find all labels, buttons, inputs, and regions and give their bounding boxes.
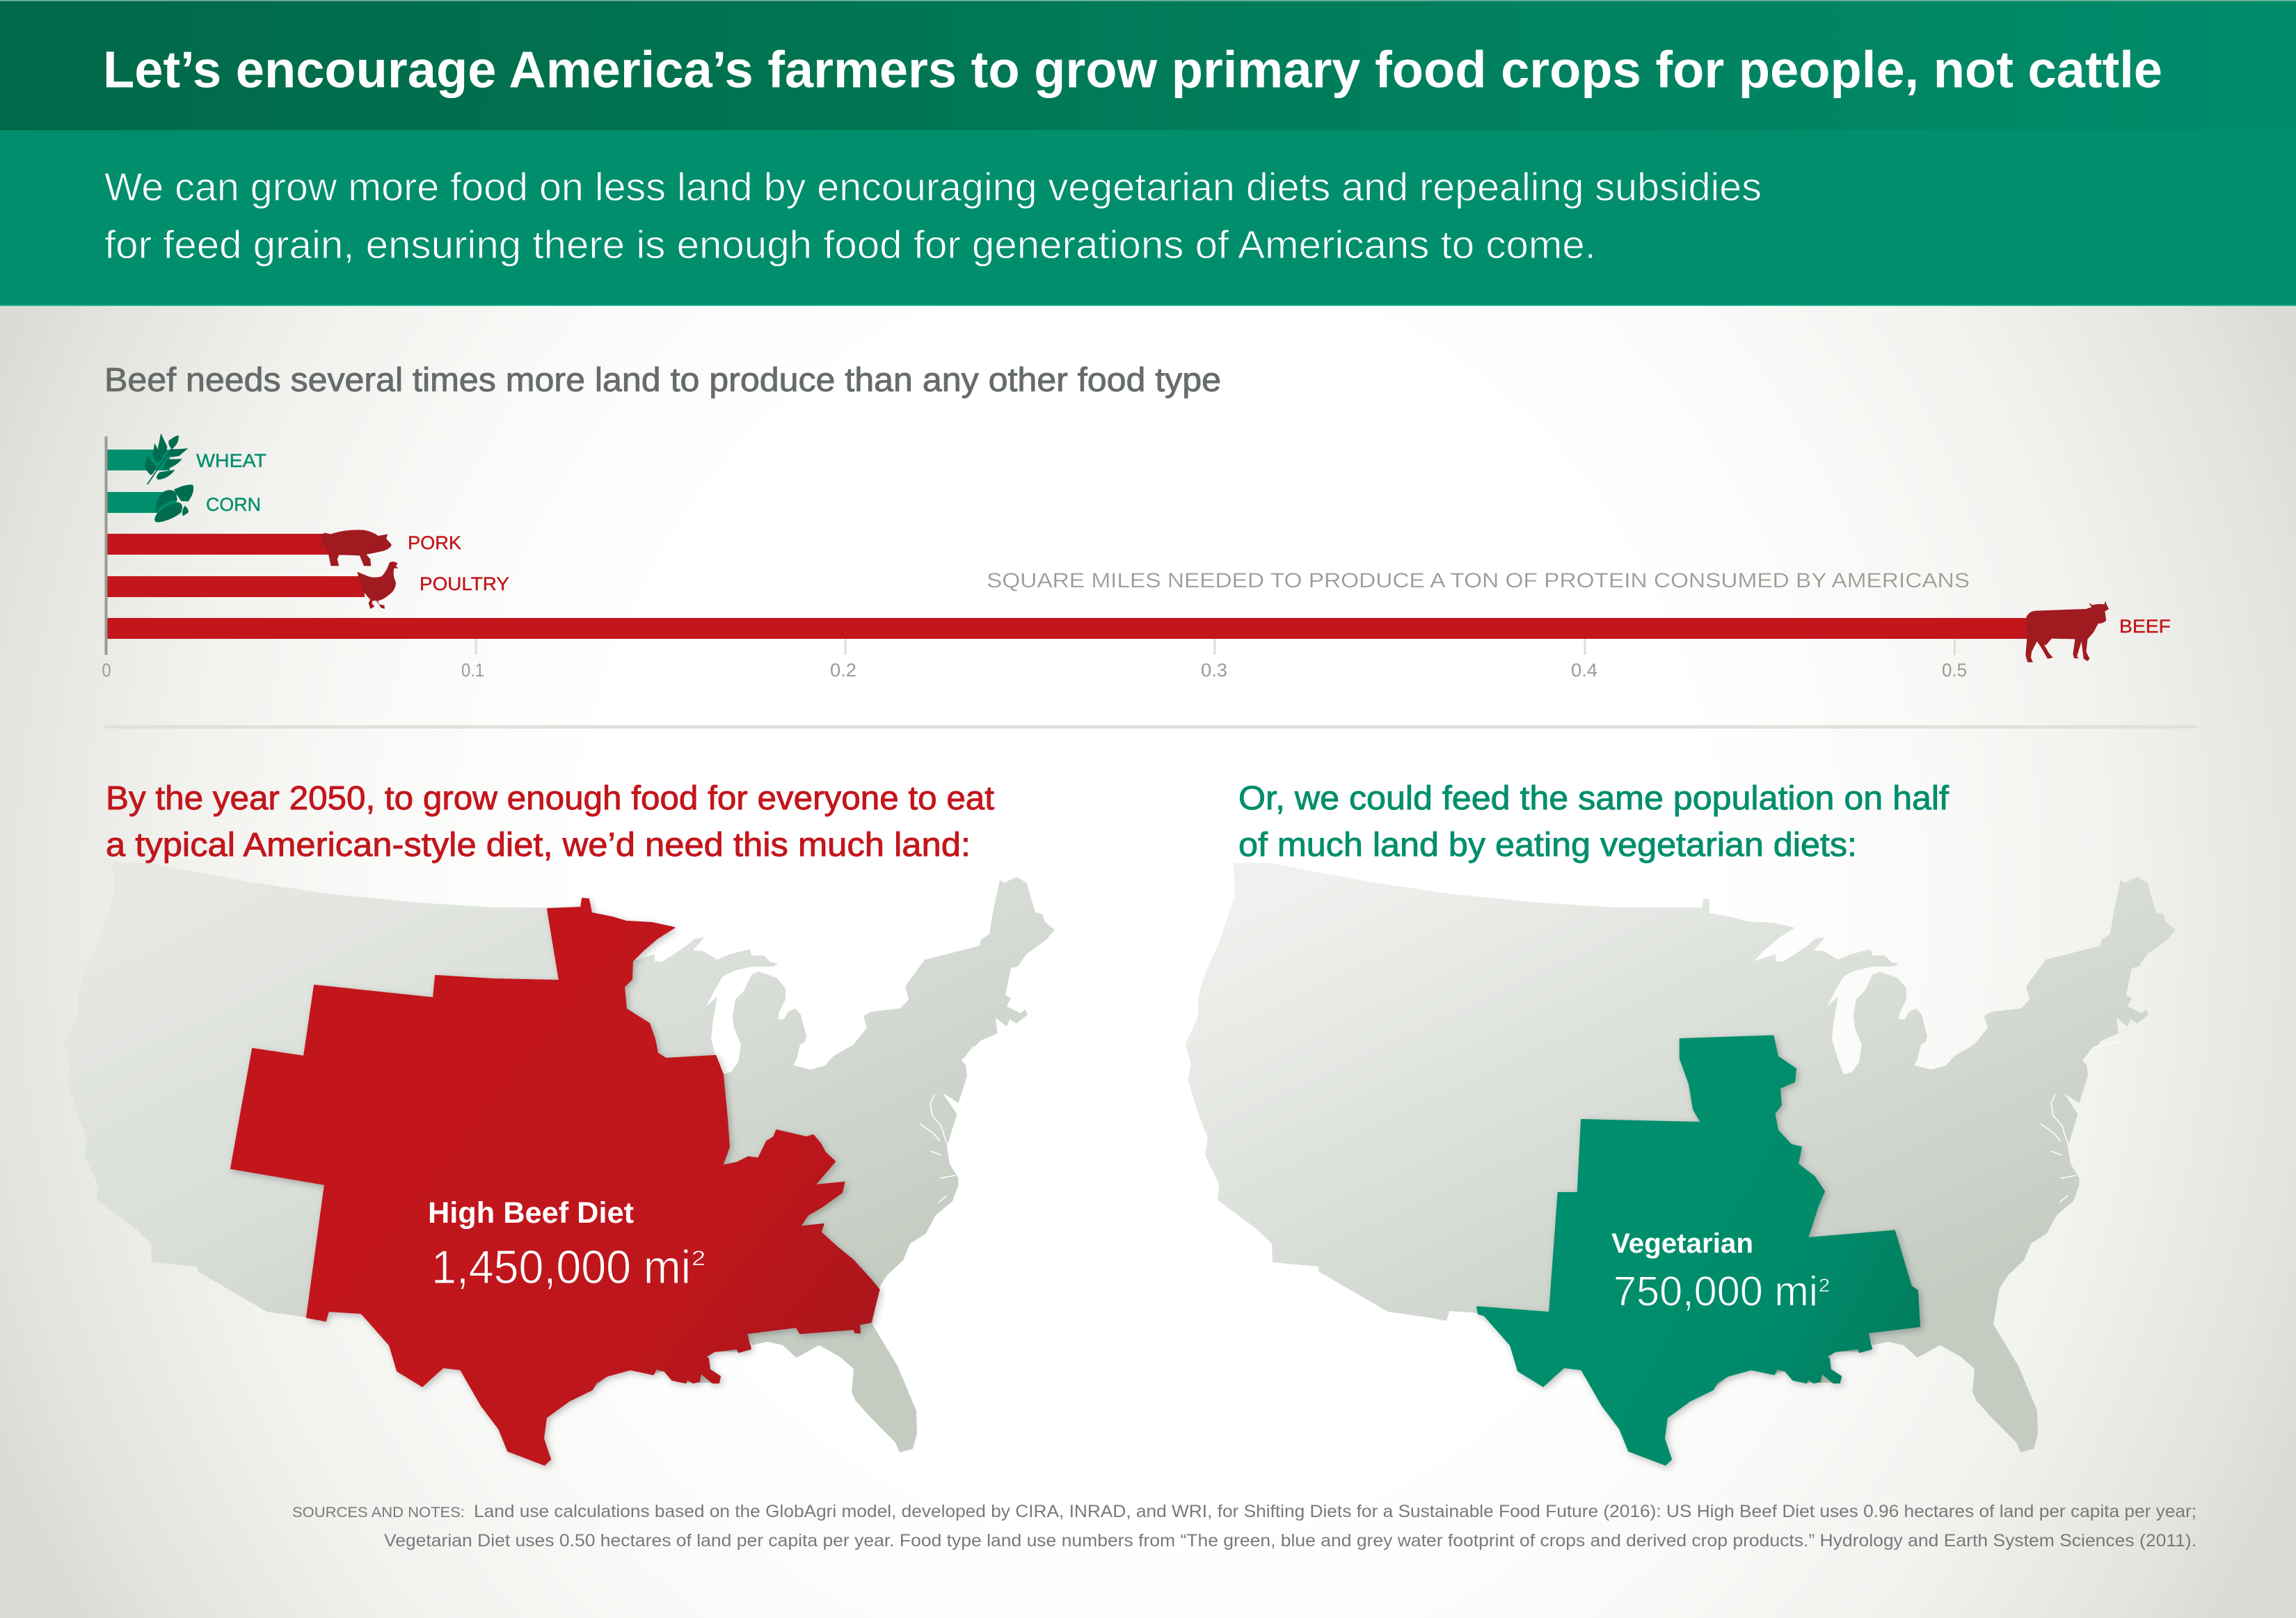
icon: chicken	[357, 562, 399, 609]
label: beef: BEEF	[2119, 616, 2171, 637]
beef bar	[107, 618, 2029, 639]
green land area	[1477, 1036, 1920, 1465]
axis tick labels: 0.2	[830, 660, 856, 681]
sources and notes	[292, 1502, 2197, 1550]
left heading	[106, 780, 994, 864]
label: vegetarian: Vegetarian	[1611, 1228, 1753, 1259]
label: high beef diet: High Beef Diet	[428, 1196, 634, 1230]
subtitle text: for feed grain, ensuring there is enough food for generations of Americans to come.	[104, 223, 1596, 267]
right map: vegetarian diet	[1186, 863, 2176, 1465]
label: poultry: POULTRY	[420, 573, 509, 594]
label: corn: CORN	[206, 494, 261, 515]
vertical axis	[104, 436, 107, 655]
red land area	[231, 898, 879, 1465]
left heading: By the year 2050, to grow enough food for everyone to eat	[106, 780, 994, 817]
left heading: a typical American-style diet, we’d need this much land:	[106, 827, 971, 864]
icon: pig	[317, 530, 392, 566]
right heading	[1238, 780, 1950, 864]
base US map	[1186, 863, 2176, 1465]
subtitle text	[104, 165, 1762, 267]
value: 1,450,000 square miles: 1,450,000 mi	[431, 1241, 691, 1294]
pork bar	[107, 534, 330, 555]
icon: wheat	[145, 434, 189, 484]
axis tick labels: 0.3	[1201, 660, 1227, 681]
value: 750,000 square miles: 2	[1819, 1275, 1830, 1296]
axis tick labels	[102, 660, 1967, 681]
header band: subtitle	[0, 130, 2296, 306]
header band: title	[0, 0, 2296, 130]
label: pork: PORK	[408, 532, 461, 553]
bar chart: land use by food type	[102, 434, 2171, 681]
axis tick labels: 0.1	[461, 660, 484, 681]
right heading: of much land by eating vegetarian diets:	[1238, 827, 1857, 864]
title: Let’s encourage America’s farmers to grow primary food crops for people, not cattle	[103, 40, 2162, 99]
icon: cow	[2025, 601, 2109, 663]
label: wheat: WHEAT	[196, 450, 266, 471]
axis tick labels: 0.5	[1942, 660, 1967, 681]
sources and notes: Land use calculations based on the GlobAgri model, developed by CIRA, INRAD, and WRI, for Shifting Diets for a Sustainable Food Future (2016): US High Beef Diet uses 0.96 hectares of land per capita per year;	[474, 1502, 2197, 1521]
coastal inlets	[920, 1042, 996, 1203]
axis tick labels: 0	[102, 660, 111, 681]
sources and notes: SOURCES AND NOTES:	[292, 1505, 465, 1521]
axis ticks	[475, 639, 1956, 655]
left map: high beef diet	[64, 863, 1055, 1465]
subtitle text: We can grow more food on less land by encouraging vegetarian diets and repealing subsidies	[104, 165, 1762, 209]
coastal inlets	[2041, 1042, 2117, 1203]
wheat bar	[107, 450, 170, 470]
sources and notes: Vegetarian Diet uses 0.50 hectares of land per capita per year. Food type land use numbers from “The green, blue and grey water footprint of crops and derived crop products.” Hydrology and Earth System Sciences (2011).	[384, 1531, 2197, 1550]
poultry bar	[107, 576, 365, 597]
chart unit caption: SQUARE MILES NEEDED TO PRODUCE A TON OF PROTEIN CONSUMED BY AMERICANS	[987, 569, 1970, 592]
base US map	[64, 863, 1055, 1465]
value: 750,000 square miles: 750,000 mi	[1613, 1268, 1818, 1315]
value: 1,450,000 square miles: 2	[692, 1247, 705, 1270]
chart heading: Beef needs several times more land to produce than any other food type	[104, 362, 1221, 399]
corn bar	[107, 492, 177, 513]
right heading: Or, we could feed the same population on half	[1238, 780, 1950, 817]
axis tick labels: 0.4	[1571, 660, 1597, 681]
icon: corn	[154, 484, 193, 523]
